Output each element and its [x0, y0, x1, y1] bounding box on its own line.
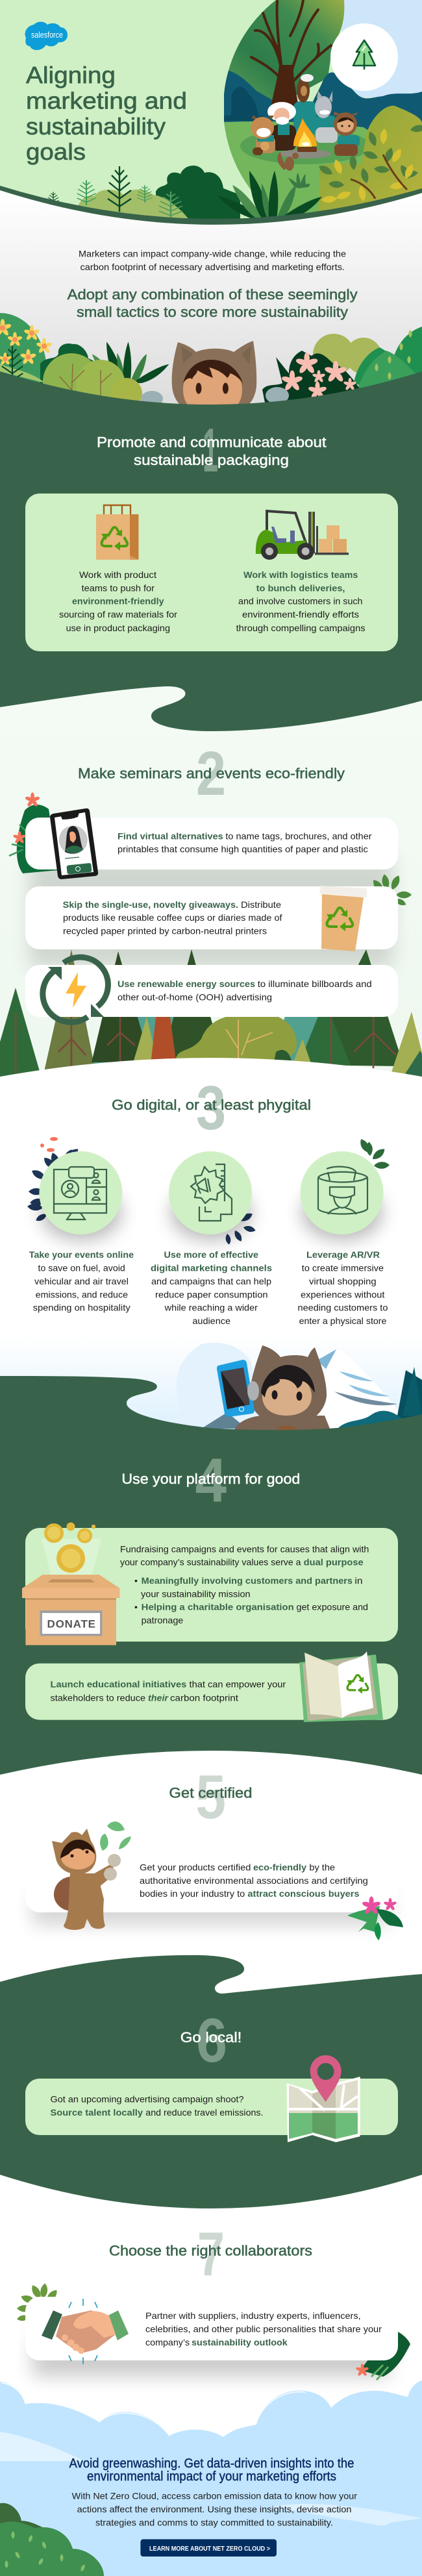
text: go local: Source talent locally [51, 2107, 143, 2118]
card shadow behind section 2 [29, 857, 393, 968]
text: collaborators: celebrities, and other public personalities that share your [145, 2323, 382, 2334]
text: certification: authoritative environmental associations and certifying [140, 1875, 368, 1886]
number 3: 3 [196, 1073, 226, 1143]
sky [341, 0, 422, 97]
hero illustration: campfire scene [224, 0, 422, 224]
panel: collaborators card [25, 2297, 398, 2364]
text: virtual alternatives [118, 831, 372, 854]
text: digital channels: audience [192, 1316, 230, 1326]
icon: virtual event monitor [54, 1167, 106, 1219]
icon: energy cycle [43, 957, 108, 1022]
text: fundraising: Fundraising campaigns and events for causes that align with [120, 1544, 369, 1554]
panel: go local card [25, 2055, 398, 2142]
text: fundraising: get exposure and [296, 1602, 368, 1612]
icon: recycled coffee cup [319, 886, 367, 951]
leaves behind collaborator card [16, 2282, 410, 2380]
panel: educational initiatives card [25, 1651, 398, 1722]
card shadow section 7 [32, 2338, 390, 2377]
text: go local: and reduce travel emissions. [145, 2107, 264, 2118]
text: educational initiatives: Launch educational initiatives [51, 1679, 187, 1690]
text: AR/VR: to create immersive [302, 1263, 384, 1273]
text: 1 [203, 416, 218, 485]
panel: digital events [39, 1151, 122, 1240]
heading: section 1 [97, 434, 326, 468]
text: renewable energy: other out-of-home (OOH) advertising [118, 992, 272, 1003]
text: fundraising: Meaningfully involving customers and partners [142, 1575, 353, 1586]
footer heading: Avoid greenwashing. Get data-driven insights into the [69, 2457, 354, 2471]
text: fundraising: Helping a charitable organisation [142, 1602, 294, 1612]
text: renewable energy: Use renewable energy sources [118, 979, 255, 989]
text: product teams: Work with product [79, 569, 156, 580]
hero curved band [0, 186, 422, 225]
text: collaborators [145, 2310, 382, 2347]
tree trunk and branches [271, 65, 299, 107]
hero foreground shrubs and ferns [47, 166, 322, 224]
text: digital channels [151, 1249, 272, 1326]
panel: lower body white background [0, 1942, 422, 2576]
text: collaborators: company’s [145, 2337, 190, 2347]
text: digital channels: digital marketing channels [151, 1263, 272, 1273]
icon: open book with recycle symbol [299, 1651, 383, 1722]
text: events online: emissions, and reduce [36, 1290, 128, 1300]
number 2: 2 [196, 739, 226, 808]
leaves behind cup [371, 873, 412, 907]
number 5: 5 [195, 1762, 226, 1832]
icon: paper bag with recycle symbol [96, 505, 139, 560]
text: AR/VR [297, 1249, 388, 1326]
squirrel [277, 152, 299, 171]
text: events online: vehicular and air travel [34, 1276, 129, 1286]
title [26, 62, 187, 165]
text: educational initiatives: that can empower your [190, 1679, 286, 1690]
text: educational initiatives: their [148, 1692, 169, 1703]
text: product teams: teams to push for [82, 582, 155, 593]
text: digital channels: while reaching a wider [164, 1303, 258, 1313]
text: educational initiatives: carbon footprint [170, 1692, 238, 1703]
panel: section 1 dark green background [0, 371, 422, 731]
forest illustration [0, 949, 422, 1078]
text: product teams [59, 569, 177, 633]
icon: VR headset person [318, 1167, 367, 1214]
panel: AR/VR [300, 1151, 383, 1240]
button: learn more [140, 2539, 277, 2557]
intro paragraph: Marketers can impact company-wide change, while reducing the [79, 248, 346, 258]
text: events online [29, 1249, 134, 1313]
heading: section 5: Get certified [169, 1784, 252, 1801]
title: sustainability [26, 113, 166, 140]
card shadow section 5 [32, 1893, 390, 1925]
icon: phone [50, 808, 98, 879]
icon: megaphone and phone [191, 1164, 232, 1221]
text: AR/VR: experiences without [301, 1290, 385, 1300]
text: giveaways: Skip the single-use, novelty giveaways. [63, 899, 238, 910]
section 2 card: giveaways [25, 873, 412, 951]
section 2 card: renewable energy [25, 957, 398, 1022]
icon: map with pin [287, 2055, 360, 2142]
panel: fundraising card [22, 1522, 398, 1645]
text: fundraising: your company’s sustainability values serve a [120, 1557, 301, 1568]
einstein [267, 102, 296, 151]
text: giveaways: products like reusable coffee cups or diaries made of [63, 912, 282, 923]
plant behind phone [9, 792, 58, 873]
text: certification [140, 1862, 368, 1899]
heading: section 7: Choose the right collaborators [109, 2243, 312, 2258]
campfire [279, 118, 331, 158]
text: digital channels: reduce paper consumption [155, 1290, 267, 1300]
text: logistics teams: environment-friendly efforts [242, 609, 359, 619]
number 7: 7 [197, 2220, 225, 2289]
section 2 background [0, 682, 422, 1097]
text: certification: by the [309, 1862, 335, 1873]
panel: digital marketing [169, 1151, 252, 1240]
intro subheading: small tactics to score more sustainability [77, 304, 348, 320]
intro paragraph [79, 248, 346, 272]
icon: handshake [42, 2299, 129, 2364]
salesforce logo [25, 22, 68, 50]
text: giveaways [63, 899, 282, 936]
text: fundraising: patronage [142, 1615, 184, 1625]
footer paragraph: With Net Zero Cloud, access carbon emission data to know how your [72, 2491, 357, 2501]
astro with marshmallow [334, 112, 360, 156]
text: digital channels: and campaigns that can help [151, 1276, 271, 1286]
text: logistics teams: through compelling campaigns [236, 623, 366, 633]
intro subheading: Adopt any combination of these seemingly [68, 286, 358, 303]
footer paragraph [72, 2491, 357, 2527]
text: product teams: environment-friendly [72, 596, 164, 606]
astro with phone scene [175, 1343, 422, 1432]
title: goals [26, 138, 86, 165]
text: go local: Got an upcoming advertising campaign shoot? [51, 2094, 244, 2105]
heading: section 3: Go digital, or at least phygital [112, 1097, 311, 1113]
foliage strip right [262, 327, 422, 409]
panel: certification card [25, 1848, 398, 1912]
heading: section 2: Make seminars and events eco-friendly [78, 766, 345, 782]
heading: section 1: sustainable packaging [134, 452, 289, 468]
text: digital channels: Use more of effective [164, 1249, 258, 1260]
text: collaborators: sustainability outlook [192, 2337, 288, 2347]
panel: section 6 dark green background [0, 1942, 422, 2208]
icon: astro holding recycling leaves [52, 1821, 131, 1930]
button: learn more: LEARN MORE ABOUT NET ZERO CLOUD > [149, 2545, 270, 2553]
icon: coins over donation box: DONATE [47, 1618, 95, 1630]
text: logistics teams: and involve customers in such [238, 596, 362, 606]
bear [293, 74, 317, 135]
text: go local [51, 2094, 264, 2118]
lynx [251, 115, 275, 155]
text: product teams: use in product packaging [66, 623, 170, 633]
number 4: 4 [195, 1445, 227, 1516]
text: collaborators: Partner with suppliers, industry experts, influencers, [145, 2310, 361, 2321]
text: logistics teams: Work with logistics teams [243, 569, 358, 580]
panel: packaging card [25, 494, 398, 651]
text: logistics teams: to bunch deliveries, [256, 582, 345, 593]
text: events online: Take your events online [29, 1249, 134, 1260]
title: marketing and [26, 87, 187, 114]
text: virtual alternatives: to name tags, brochures, and other [225, 831, 372, 842]
panel: section 3 white background [0, 1058, 422, 1344]
foliage leaves [317, 124, 422, 188]
text: fundraising: in [354, 1575, 362, 1586]
text: AR/VR: enter a physical store [299, 1316, 387, 1326]
text: events online: spending on hospitality [33, 1303, 130, 1313]
intro paragraph: carbon footprint of necessary advertising and marketing efforts. [81, 262, 345, 272]
number 6: 6 [196, 2006, 227, 2075]
footer heading: environmental impact of your marketing efforts [87, 2470, 336, 2484]
salesforce logo: salesforce [31, 31, 63, 40]
section 2 card: virtual alternatives [9, 792, 398, 879]
footer bush [0, 2503, 104, 2576]
white circle tree badge [330, 23, 398, 91]
text: AR/VR: needing customers to [297, 1303, 388, 1313]
icon: forklift with boxes [256, 511, 349, 560]
leaves behind circles [27, 1137, 390, 1245]
footer paragraph: actions affect the environment. Using these insights, devise action [77, 2504, 351, 2514]
text: virtual alternatives: printables that consume high quantities of paper and plastic [118, 844, 368, 854]
text: giveaways: recycled paper printed by carbon-neutral printers [63, 926, 267, 936]
text: educational initiatives [51, 1679, 286, 1703]
text: fundraising: your sustainability mission [141, 1588, 251, 1599]
text: certification: bodies in your industry to [140, 1888, 245, 1899]
footer heading [69, 2457, 354, 2484]
text: events online: to save on fuel, avoid [38, 1263, 125, 1273]
intro background [0, 190, 422, 429]
text: renewable energy [118, 979, 372, 1003]
text: renewable energy: to illuminate billboards and [258, 979, 372, 989]
panel: section 5 white background [0, 1751, 422, 1994]
text: giveaways: Distribute [241, 899, 281, 910]
donkey [315, 91, 338, 143]
text: certification: eco-friendly [253, 1862, 306, 1873]
sky band [0, 1336, 422, 1434]
heading: section 1: Promote and communicate about [97, 434, 326, 451]
text: fundraising: dual purpose [304, 1557, 364, 1568]
text: AR/VR: virtual shopping [309, 1276, 377, 1286]
footer paragraph: strategies and comms to stay committed to sustainability. [95, 2517, 333, 2527]
icon: coins over donation box [22, 1522, 119, 1645]
foliage strip left [0, 313, 169, 410]
text: fundraising [120, 1544, 369, 1625]
title: Aligning [26, 62, 116, 88]
panel: sky and clouds footer [0, 2381, 422, 2576]
icon: pink flowers [347, 1896, 403, 1940]
heading: section 6: Go local! [180, 2029, 242, 2045]
text: educational initiatives: stakeholders to reduce [51, 1692, 145, 1703]
text: certification: Get your products certified [140, 1862, 251, 1873]
panel: section 4 dark green background [0, 1376, 422, 1792]
heading: section 4: Use your platform for good [121, 1471, 300, 1487]
text: AR/VR: Leverage AR/VR [306, 1249, 380, 1260]
astro mascot peeking [141, 341, 289, 416]
text: product teams: sourcing of raw materials for [59, 609, 177, 619]
panel: hero background [0, 0, 422, 227]
text: virtual alternatives: Find virtual alternatives [118, 831, 223, 842]
text: fundraising: • [134, 1575, 138, 1586]
intro subheading [68, 286, 358, 320]
text: logistics teams [236, 569, 366, 633]
text: certification: attract conscious buyers [247, 1888, 360, 1899]
text: fundraising: • [134, 1602, 138, 1612]
